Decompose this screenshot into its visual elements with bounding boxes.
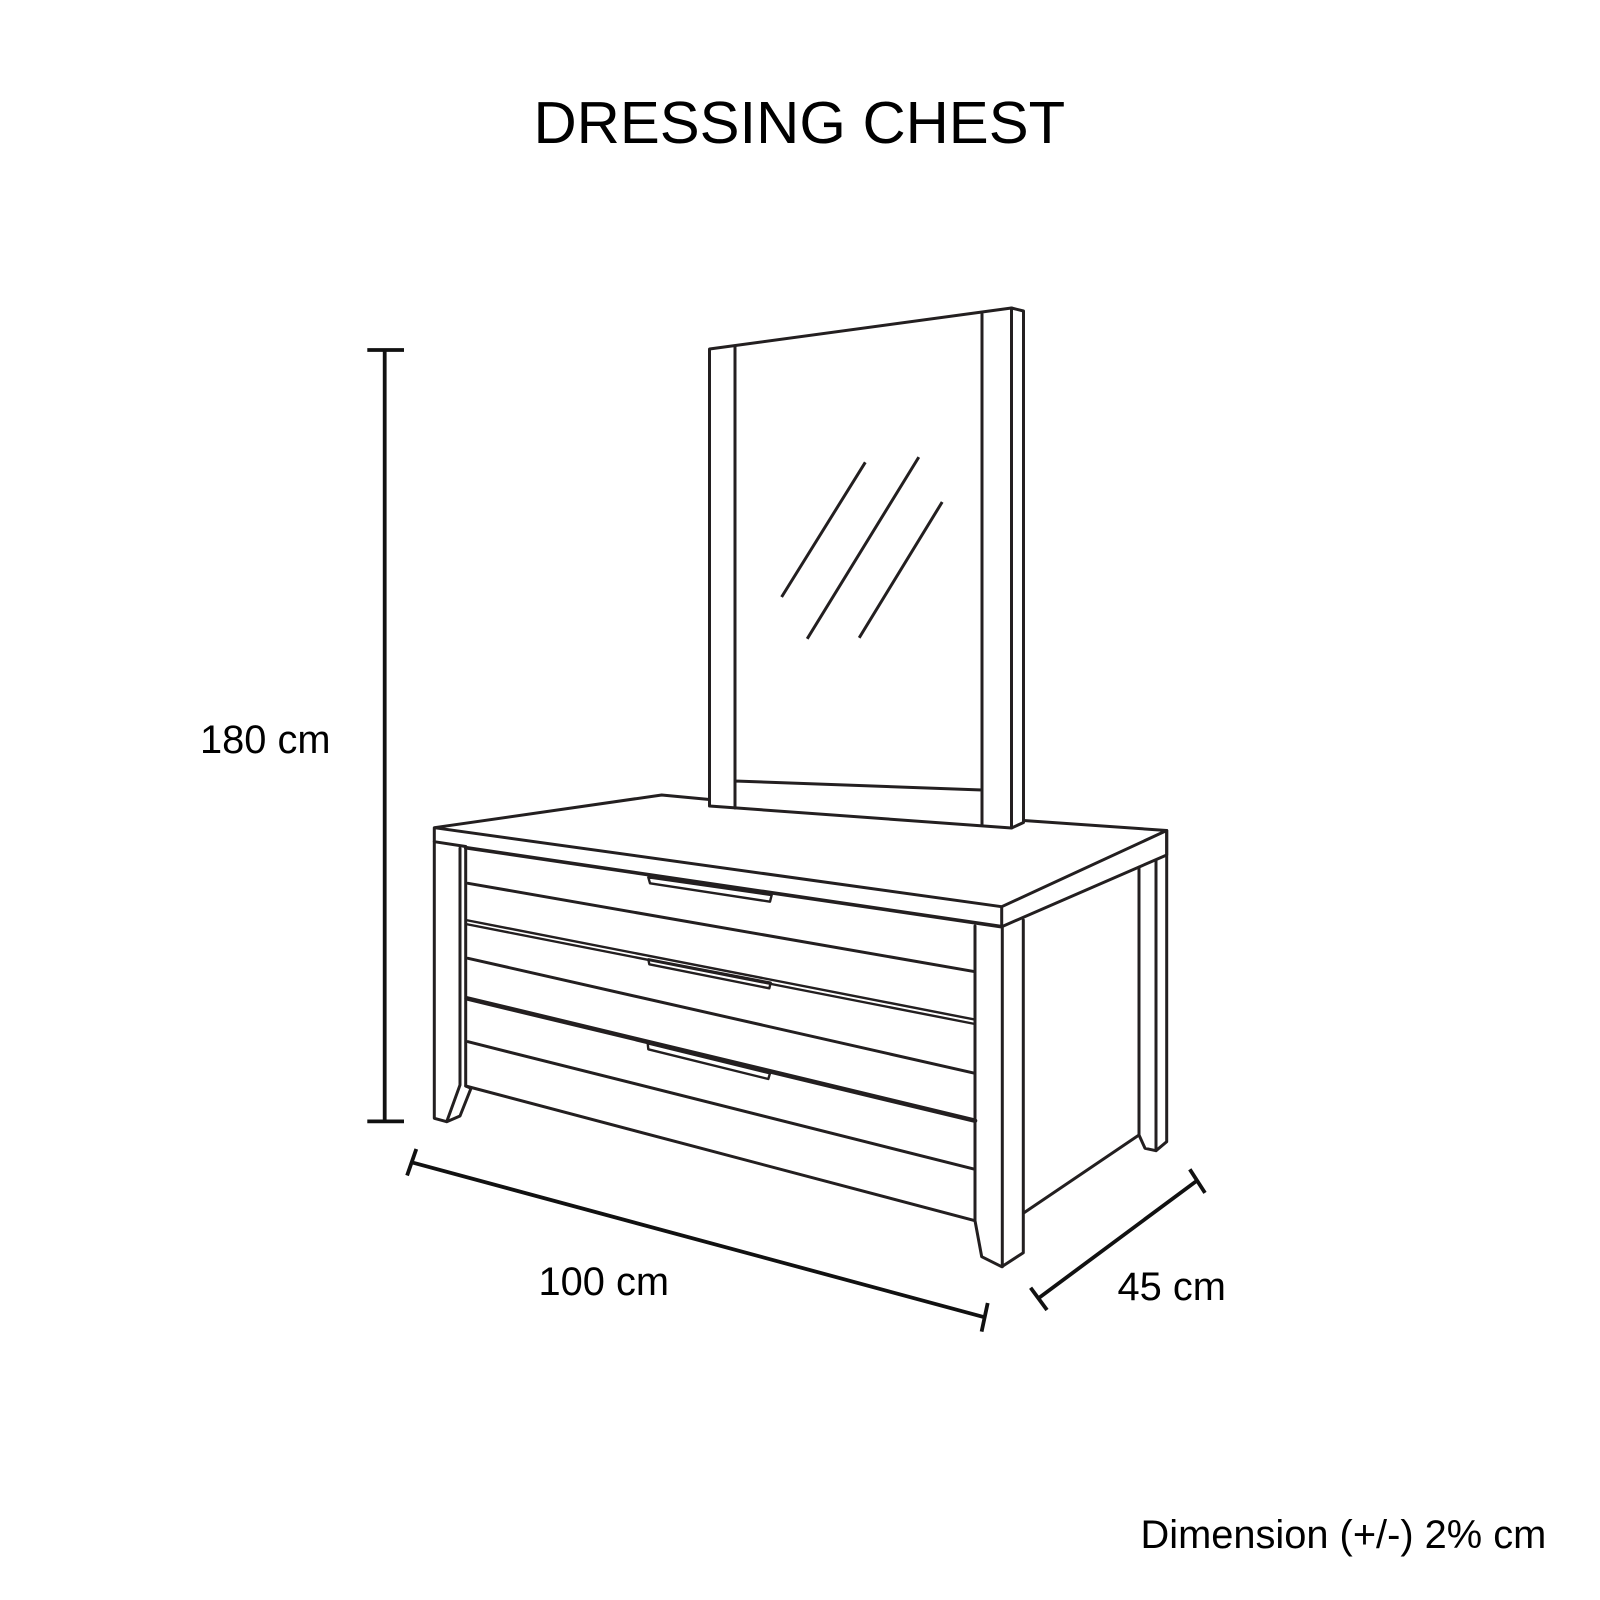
- mirror: [710, 308, 1024, 828]
- height label: 180 cm: [200, 718, 331, 762]
- width dimension bar: [407, 1149, 988, 1332]
- width label: 100 cm: [538, 1260, 669, 1304]
- table top: [434, 795, 1167, 927]
- bottom rail: [466, 1086, 975, 1221]
- back right leg: [1139, 830, 1167, 1151]
- depth dimension bar: [1031, 1169, 1205, 1310]
- side panel bottom: [1024, 1135, 1139, 1213]
- title: DRESSING CHEST: [534, 89, 1065, 156]
- mirror inner frame: [735, 308, 1012, 828]
- front right leg: [975, 920, 1023, 1267]
- first drawer lower line: [468, 883, 975, 972]
- left leg: [434, 842, 471, 1122]
- depth label: 45 cm: [1118, 1265, 1226, 1309]
- mirror frame outline: [710, 308, 1024, 828]
- tolerance note: Dimension (+/-) 2% cm: [1140, 1513, 1546, 1557]
- second drawer lower line: [468, 958, 975, 1073]
- first drawer: [466, 848, 1002, 927]
- mirror glare lines: [782, 457, 942, 639]
- drawer handles: [648, 877, 772, 1079]
- dressing chest: [434, 795, 1167, 1267]
- second drawer: [466, 920, 975, 1024]
- third drawer: [467, 998, 975, 1121]
- third drawer lower line: [468, 1042, 975, 1169]
- height dimension bar: [367, 350, 404, 1121]
